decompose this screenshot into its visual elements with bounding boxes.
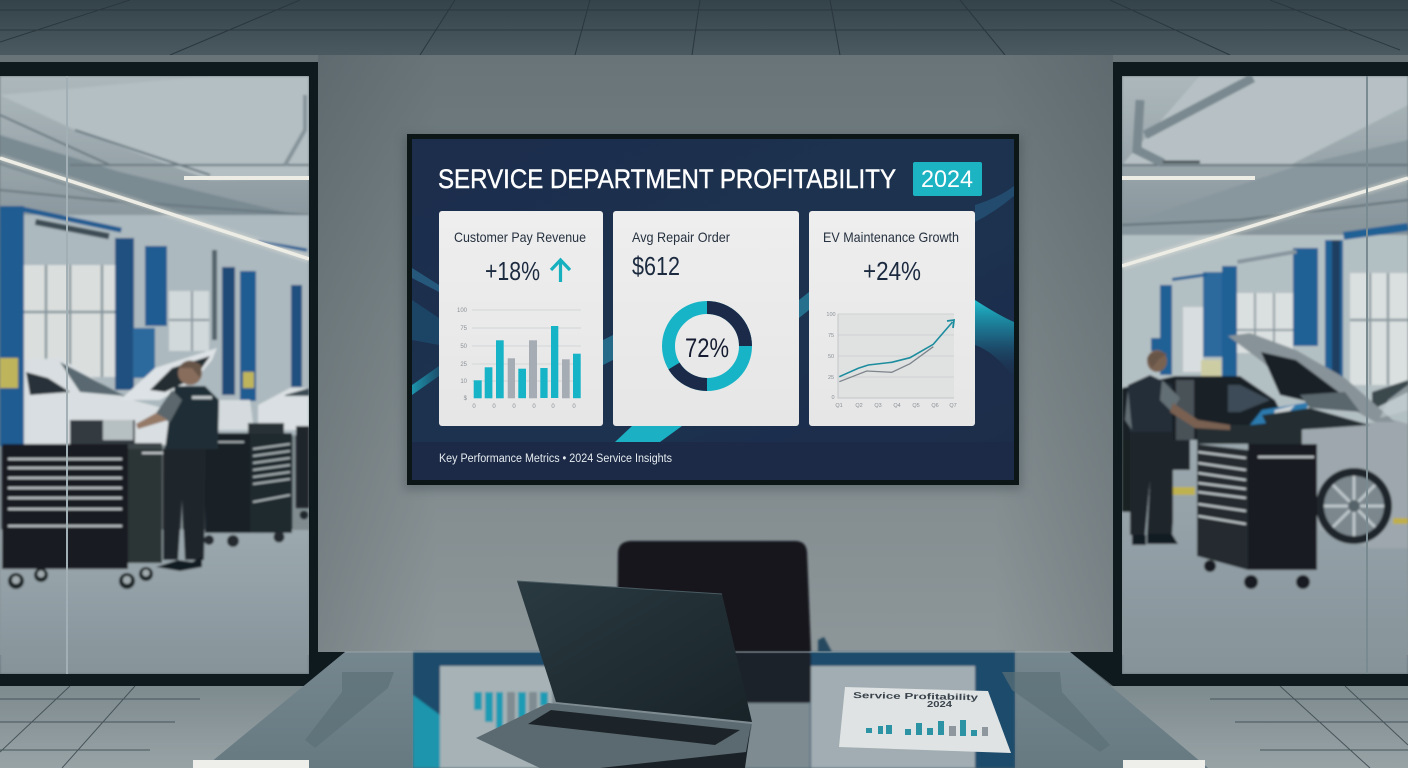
glass edge left: [66, 76, 68, 674]
card heading: Customer Pay Revenue: [454, 229, 586, 245]
ceiling: [0, 0, 1408, 56]
line chart: 25: [828, 375, 834, 381]
year badge: [913, 162, 982, 196]
footer text: Key Performance Metrics • 2024 Service Insights: [439, 453, 672, 465]
blue lifts right: [1150, 222, 1408, 378]
shop floor right: [1122, 440, 1408, 674]
technician right: [1125, 350, 1230, 545]
right window: service bay: [1122, 76, 1408, 674]
laptop lid: [517, 581, 752, 722]
glass edge right: [1366, 76, 1368, 674]
back wall: [0, 55, 1408, 655]
wall display: [407, 134, 1019, 485]
toolbox far right left: [296, 426, 309, 519]
left window frame: [0, 62, 318, 686]
shop ceiling left: [0, 76, 309, 217]
bar chart: 10: [460, 379, 468, 385]
bar chart: 0: [472, 404, 476, 410]
line chart: [826, 312, 957, 409]
laptop base: [476, 703, 752, 768]
bar chart: [457, 308, 581, 410]
main title: SERVICE DEPARTMENT PROFITABILITY: [438, 164, 896, 194]
table glass side panels: [204, 652, 413, 768]
silver car right: [1228, 333, 1408, 548]
growth value: +24%: [863, 256, 921, 286]
back wall left: [0, 215, 309, 435]
line chart: 75: [828, 333, 834, 339]
revenue value: +18%: [485, 256, 540, 286]
bar chart: 0: [512, 404, 516, 410]
bar chart: 0: [551, 404, 555, 410]
bar chart: 0: [492, 404, 496, 410]
line chart: Q7: [949, 403, 957, 409]
line chart: 50: [828, 354, 834, 360]
year badge: 2024: [921, 166, 973, 193]
office chair: [617, 541, 832, 652]
right window frame: [1113, 62, 1408, 686]
icon: up arrow: [551, 260, 570, 282]
card heading: EV Maintenance Growth: [823, 229, 959, 245]
line chart: 100: [826, 312, 836, 318]
line chart: Q6: [931, 403, 939, 409]
wall shadow behind screen: [404, 136, 1022, 490]
bar chart: $: [464, 396, 468, 402]
line chart: Q3: [874, 403, 882, 409]
back wall right: [1122, 235, 1408, 435]
bar chart: 100: [457, 308, 468, 314]
card: EV maintenance growth: [809, 211, 975, 426]
printed report on table: Service Profitability: [853, 690, 979, 702]
line chart: 0: [831, 395, 835, 401]
light strips left: [0, 158, 309, 259]
donut chart: [668, 308, 746, 385]
table brackets: [305, 672, 394, 748]
white car left: [24, 348, 309, 445]
dark car right: [1122, 376, 1408, 448]
blue lifts left: [0, 206, 307, 446]
screen background swooshes: [412, 186, 1014, 442]
toolbox rear left: [204, 423, 292, 547]
card: average repair order: [613, 211, 799, 426]
card: customer pay revenue: [439, 211, 603, 426]
donut chart: 72%: [685, 333, 729, 363]
left window: service bay: [0, 76, 309, 674]
line chart: Q5: [912, 403, 920, 409]
floor lights: [193, 760, 1205, 768]
laptop: [476, 581, 752, 768]
technician left: [136, 360, 219, 571]
floor: [0, 686, 1408, 768]
printed report on table: 2024: [927, 699, 952, 709]
shop ceiling right: [1122, 76, 1408, 236]
windows right: [1183, 273, 1408, 385]
toolbox front left: [2, 420, 173, 589]
line chart: Q1: [835, 403, 843, 409]
repair order value: $612: [632, 251, 680, 281]
bar chart: 0: [572, 404, 576, 410]
shop floor left: [0, 530, 309, 674]
toolbox right: [1197, 425, 1317, 589]
windows left: [24, 265, 209, 377]
table reflection of display: [413, 652, 1015, 768]
bar chart: 0: [532, 404, 536, 410]
footer band: [412, 442, 1014, 480]
line chart: Q4: [893, 403, 901, 409]
printed report on table: [839, 687, 1011, 753]
card heading: Avg Repair Order: [632, 229, 730, 245]
bar chart: 75: [460, 326, 468, 332]
line chart: Q2: [855, 403, 863, 409]
light strips right: [1122, 178, 1408, 266]
bar chart: 50: [460, 344, 468, 350]
glass table: [204, 652, 1208, 768]
bar chart: 25: [460, 362, 468, 368]
